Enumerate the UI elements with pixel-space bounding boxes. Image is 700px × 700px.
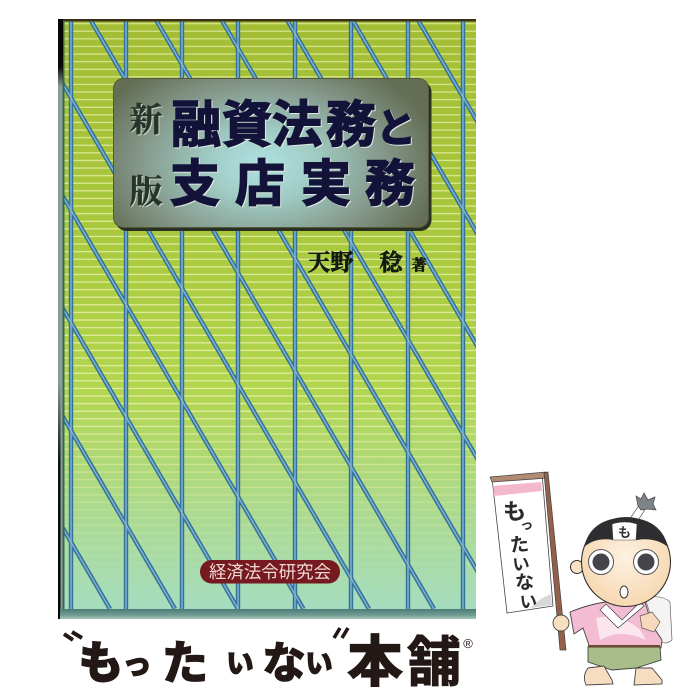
author: 天野 稔 著: 天 (308, 250, 330, 275)
hair (584, 518, 668, 547)
cover background (58, 19, 476, 619)
logo: もったいない本舗: た (162, 637, 208, 689)
edition mark: 新版: 新 (130, 102, 162, 139)
logo: もったいない本舗: 本 (347, 631, 403, 693)
diagonal and vertical blue lines (64, 22, 476, 609)
title: 融資法務と / 支店実務: 実 (301, 156, 351, 212)
fist (640, 612, 660, 632)
title: 融資法務と / 支店実務: 支 (170, 156, 220, 212)
banner pole (490, 472, 548, 482)
bottom edge (60, 609, 476, 619)
author: 天野 稔 著: 稔 (380, 250, 404, 275)
forehead badge: も (612, 522, 637, 540)
banner text: もったいない (502, 497, 541, 613)
kimono highlight (596, 616, 646, 640)
logo: もったいない本舗: い (306, 649, 332, 679)
kimono collar (600, 602, 644, 628)
belt (588, 645, 660, 648)
author: 天野 稔 著: 著 (411, 256, 427, 274)
body: kimono (570, 602, 662, 648)
logo: もったいない本舗: な (262, 640, 306, 688)
banner text: もったいない: い (519, 592, 538, 612)
banner text: もったいない: い (512, 554, 530, 575)
hand on pole (553, 615, 569, 631)
logo: もったいない本舗: も (79, 639, 123, 688)
edition mark: 新版: 版 (130, 174, 162, 211)
title: 融資法務と / 支店実務: 店 (235, 156, 285, 212)
logo: もったいない本舗: っ (122, 649, 152, 681)
horizontal stripes (63, 21, 476, 609)
logo: もったいない本舗: 舗 (407, 633, 461, 693)
closing quote mark (334, 628, 348, 638)
mascot with banner (490, 472, 672, 685)
title: 融資法務と / 支店実務: 務 (365, 156, 415, 212)
trousers (588, 647, 661, 670)
title: 融資法務と / 支店実務: 務 (326, 97, 376, 153)
author: 天野 稔 著 (308, 250, 427, 275)
spine edge (58, 19, 64, 619)
forehead badge: も: も (618, 525, 631, 540)
title panel (114, 78, 432, 231)
banner text: もったいない: た (509, 533, 530, 557)
opening quote mark (64, 632, 82, 640)
title: 融資法務と / 支店実務: 資 (222, 97, 272, 153)
top edge (58, 19, 476, 22)
banner text: もったいない: も (502, 497, 527, 525)
ear (570, 560, 584, 574)
panel plate (114, 78, 432, 231)
head (582, 518, 670, 606)
title: 融資法務と / 支店実務 (170, 97, 416, 212)
title: 融資法務と / 支店実務: 融 (171, 97, 221, 153)
mouth (620, 586, 628, 598)
edition mark: 新版 (130, 102, 162, 211)
eyes (588, 550, 658, 574)
logo: もったいない本舗: い (226, 649, 254, 679)
title: 融資法務と / 支店実務: 法 (272, 97, 322, 153)
topknot (629, 493, 656, 522)
banner text: もったいない: っ (520, 517, 534, 533)
author: 天野 稔 著: 野 (330, 250, 354, 275)
logo: もったいない本舗 (64, 628, 473, 693)
banner cloth (492, 473, 553, 613)
banner text: もったいない: な (514, 571, 535, 595)
title: 融資法務と / 支店実務: と (376, 107, 416, 151)
logo: もったいない本舗: ® (463, 636, 473, 651)
white sack (645, 597, 672, 643)
feet (584, 666, 662, 685)
book cover (58, 19, 476, 619)
publisher badge: 経済法令研究会: 経済法令研究会 (209, 562, 331, 582)
